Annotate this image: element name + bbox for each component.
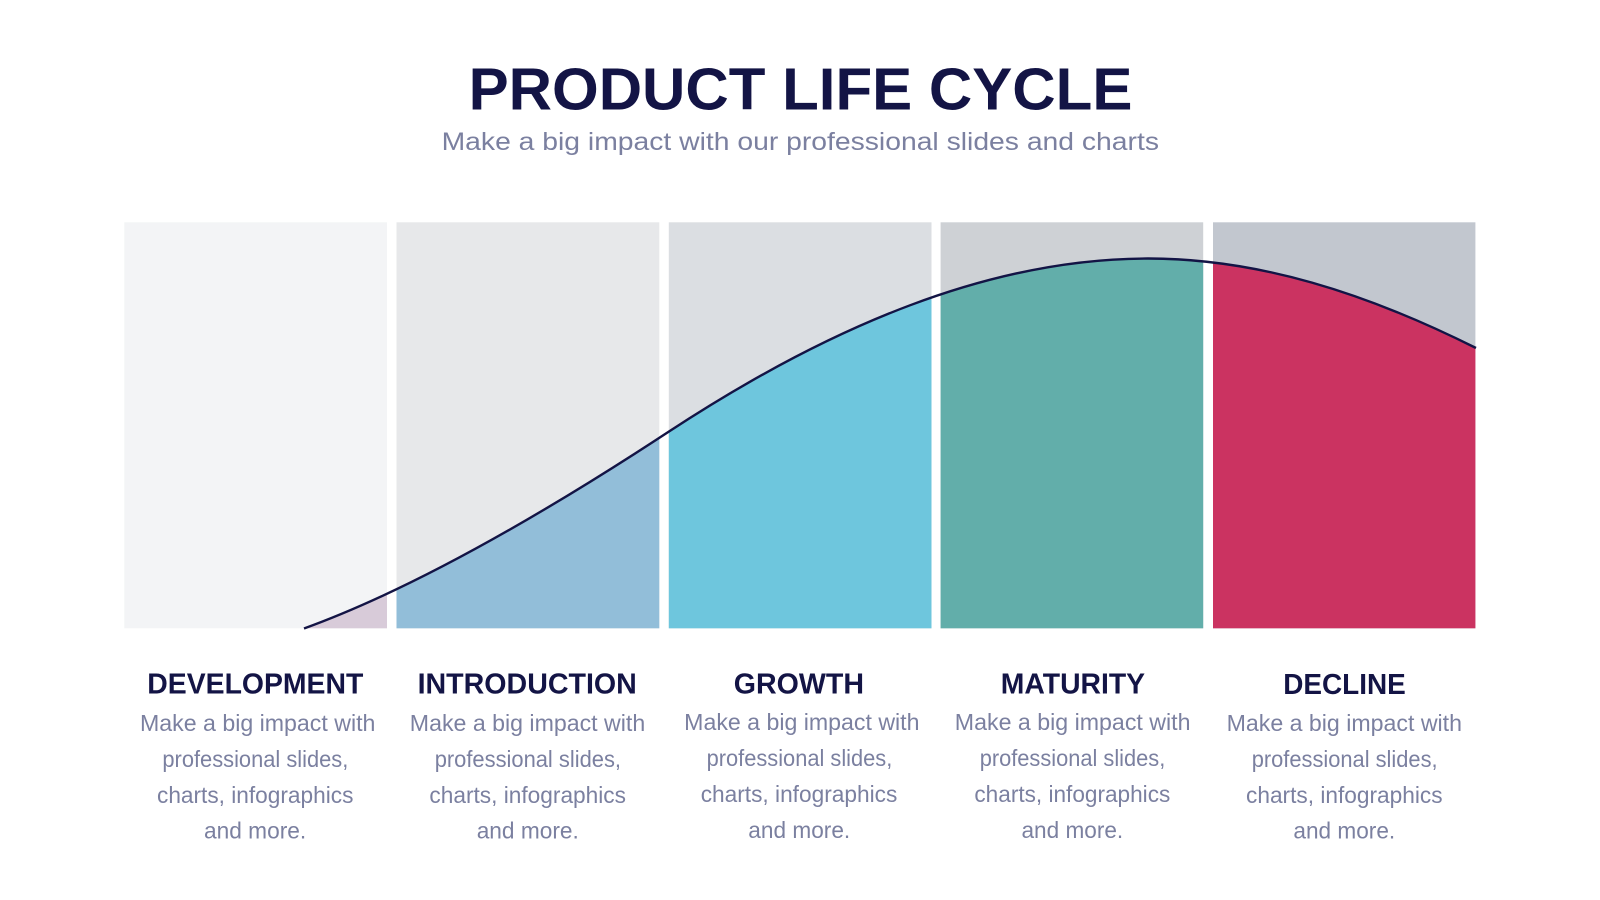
description: growth: Make a big impact with [684, 709, 920, 735]
text block: decline [1227, 669, 1462, 844]
panel: growth background [669, 222, 932, 628]
description: development: Make a big impact with [140, 710, 375, 736]
heading: maturity: MATURITY [1001, 668, 1145, 700]
subtitle: Make a big impact with our professional slides and charts [442, 128, 1159, 156]
panel: decline background [1213, 222, 1475, 628]
text block: development [140, 669, 375, 844]
description: growth: charts, infographics [701, 781, 897, 807]
chart: product life cycle curve across five stages [124, 222, 1476, 629]
description: introduction: charts, infographics [429, 782, 626, 808]
description: decline: and more. [1293, 818, 1395, 844]
description: introduction: and more. [477, 818, 579, 844]
description: maturity [955, 709, 1190, 843]
area: maturity fill [941, 222, 1203, 628]
text block: introduction [410, 668, 645, 844]
description: decline: professional slides, [1252, 746, 1438, 772]
description: maturity: professional slides, [980, 745, 1165, 771]
heading: development: DEVELOPMENT [147, 669, 364, 701]
description: maturity: Make a big impact with [955, 709, 1190, 735]
description: decline: charts, infographics [1246, 782, 1443, 808]
panel: introduction background [396, 222, 659, 628]
description: development: and more. [204, 818, 306, 844]
heading: introduction: INTRODUCTION [418, 668, 637, 700]
text block: maturity [955, 668, 1190, 843]
description: decline: Make a big impact with [1227, 710, 1462, 736]
description: development: professional slides, [162, 746, 348, 772]
area: growth fill [668, 298, 932, 628]
panel: maturity background [941, 222, 1203, 628]
heading: growth: GROWTH [734, 668, 864, 700]
description: introduction: Make a big impact with [410, 710, 645, 736]
heading: decline: DECLINE [1283, 669, 1406, 701]
panel: development background [124, 222, 387, 628]
description: maturity: charts, infographics [974, 781, 1170, 807]
title: PRODUCT LIFE CYCLE [469, 55, 1132, 122]
description: growth: and more. [748, 817, 850, 843]
description: growth [684, 709, 920, 843]
description: development: charts, infographics [157, 782, 353, 808]
description: development [140, 710, 375, 844]
description: growth: professional slides, [707, 745, 892, 771]
description: decline [1227, 710, 1462, 844]
description: introduction [410, 710, 645, 844]
curve line [304, 258, 1476, 628]
area: decline fill [1213, 264, 1476, 628]
description: maturity: and more. [1022, 817, 1123, 843]
description: introduction: professional slides, [435, 746, 621, 772]
text block: growth [684, 668, 920, 843]
area: development fill [308, 595, 387, 628]
area: introduction fill [396, 439, 660, 628]
